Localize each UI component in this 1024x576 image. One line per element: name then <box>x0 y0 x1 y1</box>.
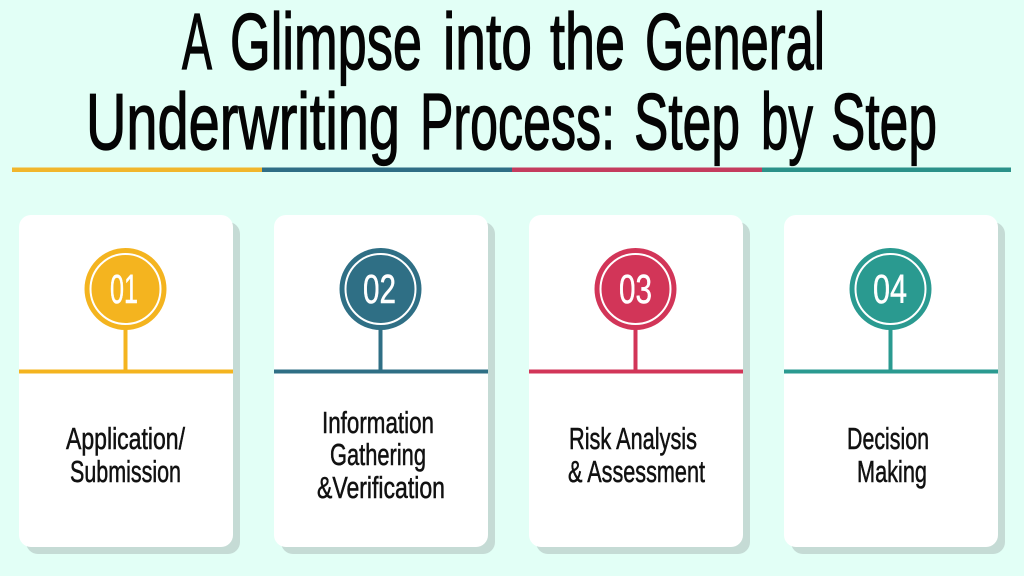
title: Process: <box>420 77 615 166</box>
step 1 number badge: 01 <box>110 266 138 312</box>
step 3 label: Risk Analysis <box>569 421 697 456</box>
step 2 connector <box>274 329 488 374</box>
title: Step <box>634 77 740 166</box>
step 3 label <box>568 421 705 489</box>
step 1 label: Application/ <box>66 421 185 456</box>
step 3 label: & Assessment <box>568 454 705 489</box>
step 4 label <box>847 421 929 489</box>
step 2 label: &Verification <box>317 470 445 505</box>
panel: step 3 risk analysis <box>529 215 750 554</box>
title: Step <box>831 77 937 166</box>
panel: step 1 application <box>19 215 240 554</box>
panel: step 4 decision making <box>784 215 1005 554</box>
step 4 label: Decision <box>847 421 929 456</box>
step 1 connector <box>19 329 233 374</box>
title underline <box>12 168 1011 172</box>
step 4 label: Making <box>857 454 927 489</box>
step 1 label: Submission <box>70 454 181 489</box>
panel: step 2 information <box>274 215 495 554</box>
step 4 number badge <box>850 248 932 330</box>
title: by <box>761 77 813 166</box>
title: Underwriting <box>86 77 400 166</box>
step 2 number badge: 02 <box>363 266 396 312</box>
step 3 connector <box>529 329 743 374</box>
step 2 number badge <box>340 248 422 330</box>
step 2 label: Gathering <box>330 437 426 472</box>
step 3 number badge <box>594 248 676 330</box>
step 4 connector <box>784 329 998 374</box>
title <box>86 0 937 166</box>
step 3 number badge: 03 <box>619 266 652 312</box>
step 1 label <box>66 421 185 489</box>
step 2 label <box>317 405 445 505</box>
step 1 number badge <box>84 248 166 330</box>
step 4 number badge: 04 <box>873 266 907 312</box>
step 2 label: Information <box>322 405 434 440</box>
